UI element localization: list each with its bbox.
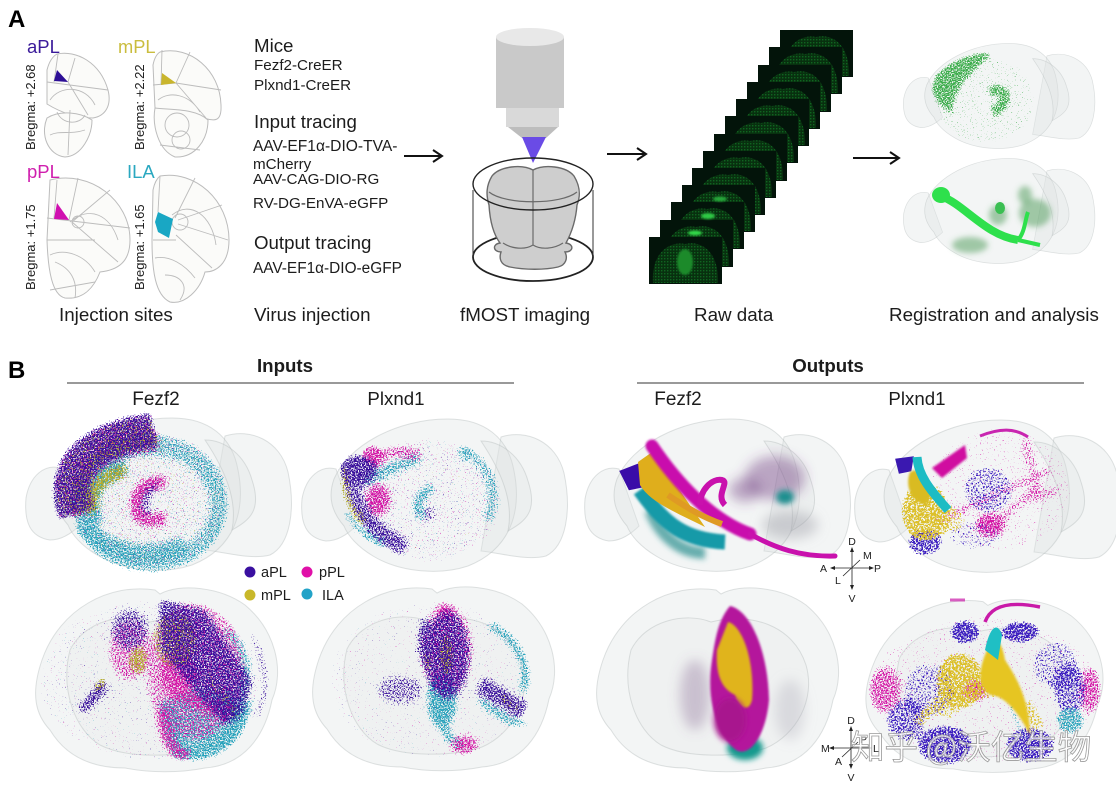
axis: sagittal orientation — [820, 536, 881, 605]
panel: virus injection text: Plxnd1-CreER — [254, 77, 351, 94]
legend: pPL — [319, 565, 345, 581]
panel: virus injection text: RV-DG-EnVA-eGFP — [253, 195, 388, 212]
panel: fMOST imaging — [460, 28, 593, 325]
section: mPL: Bregma: +2.22 — [132, 64, 147, 150]
panel: virus injection text: Mice — [254, 35, 293, 56]
legend: ILA — [322, 588, 344, 604]
section: ILA: ILA — [127, 161, 155, 182]
panel label B: B — [8, 357, 25, 384]
panel: virus injection text — [253, 35, 402, 325]
brain: inputs Fezf2 coronal — [35, 588, 278, 772]
panel: virus injection text: Fezf2-CreER — [254, 57, 343, 74]
caption: fMOST imaging — [460, 304, 590, 325]
axis: sagittal orientation: D — [848, 536, 856, 548]
brain: outputs Fezf2 coronal — [597, 588, 839, 772]
axis: coronal orientation: L — [873, 743, 879, 755]
panel: virus injection text: Output tracing — [254, 232, 371, 253]
axis: coronal orientation: M — [821, 743, 830, 755]
axis: coronal orientation — [821, 715, 879, 784]
section: ILA: Bregma: +1.65 — [132, 204, 147, 290]
brain: outputs Fezf2 sagittal — [585, 419, 850, 571]
axis: coronal orientation: D — [847, 715, 855, 727]
panel: raw data stack — [649, 30, 853, 325]
caption: Raw data — [694, 304, 774, 325]
panel: injection sites — [23, 36, 229, 325]
heading: Inputs: Inputs — [257, 355, 313, 376]
panel: registration and analysis — [889, 43, 1099, 325]
brain: inputs Fezf2 sagittal — [26, 418, 291, 572]
section: mPL — [118, 36, 221, 157]
heading: Outputs: Outputs — [792, 355, 864, 376]
legend — [244, 565, 345, 604]
arrow 1 — [404, 150, 442, 162]
panel: virus injection text: AAV-EF1α-DIO-eGFP — [253, 260, 402, 277]
panel: virus injection text: Input tracing — [254, 111, 357, 132]
brain: outputs Plxnd1 sagittal — [855, 420, 1116, 572]
heading: Inputs: Fezf2 — [132, 389, 180, 410]
caption: Registration and analysis — [889, 304, 1099, 325]
brain: output registration — [903, 158, 1095, 263]
watermark: 知乎 @沃亿生物 — [851, 720, 1091, 769]
cylinder with brain — [473, 158, 593, 281]
section: aPL — [23, 36, 109, 157]
arrow 3 — [853, 152, 899, 164]
axis: sagittal orientation: L — [835, 575, 841, 587]
axis: sagittal orientation: V — [848, 593, 856, 605]
heading: Inputs: Plxnd1 — [367, 388, 425, 409]
brain: outputs Plxnd1 coronal — [866, 600, 1103, 772]
microscope — [496, 28, 564, 163]
section: pPL — [23, 161, 130, 298]
axis: sagittal orientation: A — [820, 563, 827, 575]
heading: Inputs — [67, 355, 514, 410]
section: mPL: mPL — [118, 36, 156, 57]
section: aPL: aPL — [27, 36, 60, 57]
axis: coronal orientation: A — [835, 756, 842, 768]
panel: virus injection text: Virus injection — [254, 304, 371, 325]
heading: Outputs: Plxnd1 — [888, 388, 946, 409]
axis: coronal orientation: V — [847, 772, 855, 784]
axis: sagittal orientation: M — [863, 550, 872, 562]
section: ILA — [127, 161, 229, 302]
caption: Injection sites — [59, 304, 173, 325]
legend: mPL — [261, 588, 291, 604]
panel: virus injection text: mCherry — [253, 156, 312, 173]
brain: input registration — [903, 43, 1095, 148]
brain: inputs Plxnd1 coronal — [313, 587, 555, 771]
axis: sagittal orientation: P — [874, 563, 881, 575]
panel label A: A — [8, 6, 25, 33]
heading: Outputs: Fezf2 — [654, 389, 702, 410]
legend: aPL — [261, 565, 287, 581]
axis: coronal orientation: P — [860, 734, 867, 746]
heading: Outputs — [637, 355, 1084, 410]
section: aPL: Bregma: +2.68 — [23, 64, 38, 150]
arrow 2 — [607, 148, 646, 160]
panel: virus injection text: AAV-EF1α-DIO-TVA- — [253, 138, 397, 155]
section: pPL: Bregma: +1.75 — [23, 204, 38, 290]
brain: inputs Plxnd1 sagittal — [302, 419, 567, 571]
section: pPL: pPL — [27, 161, 60, 182]
panel: virus injection text: AAV-CAG-DIO-RG — [253, 171, 379, 188]
